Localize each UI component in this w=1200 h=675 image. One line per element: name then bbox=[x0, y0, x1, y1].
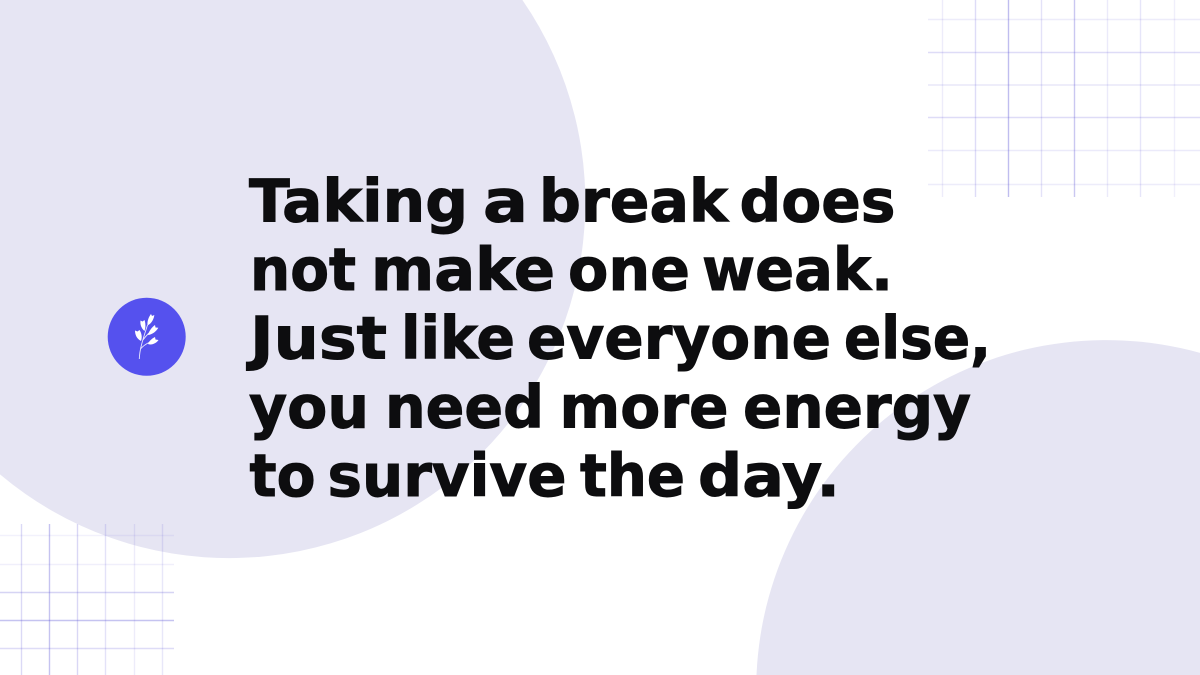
background circle: top left bbox=[0, 0, 585, 558]
quote text: everyone bbox=[527, 304, 831, 373]
quote text: a bbox=[483, 166, 528, 236]
quote text: you bbox=[249, 372, 369, 442]
quote text: Just bbox=[246, 304, 387, 373]
quote text: need bbox=[385, 372, 544, 442]
quote text: the bbox=[580, 441, 685, 510]
quote text: weak. bbox=[702, 235, 893, 304]
quote text: else, bbox=[844, 304, 991, 373]
quote text: day. bbox=[698, 441, 840, 510]
background circle: bottom right bbox=[756, 340, 1200, 675]
icon: leaf sprig badge bbox=[108, 298, 186, 376]
quote text: energy bbox=[743, 372, 971, 442]
quote text: one bbox=[568, 235, 690, 304]
quote text bbox=[246, 166, 991, 510]
quote text: more bbox=[560, 372, 728, 442]
quote text: does bbox=[740, 166, 896, 236]
quote text: like bbox=[401, 304, 515, 373]
quote text: Taking bbox=[249, 166, 468, 236]
quote text: make bbox=[371, 235, 555, 304]
quote text: to bbox=[250, 441, 316, 510]
grid pattern: top right bbox=[928, 0, 1200, 197]
quote text: survive bbox=[328, 441, 566, 510]
quote text: not bbox=[250, 235, 356, 304]
quote text: break bbox=[539, 166, 730, 236]
grid pattern: bottom left bbox=[0, 524, 174, 675]
